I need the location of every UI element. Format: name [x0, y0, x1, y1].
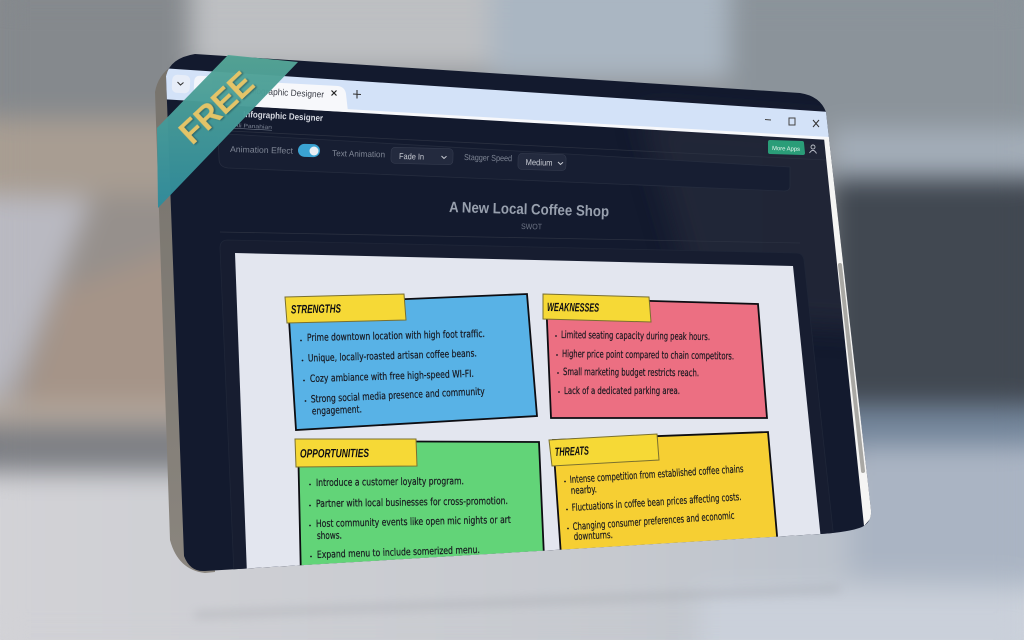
new tab: [353, 90, 361, 98]
threats list: downturns.: [574, 530, 613, 543]
window controls: [765, 119, 771, 120]
heading tag: weaknesses: WEAKNESSES: [547, 300, 599, 315]
scrollbar thumb: [840, 265, 863, 471]
ribbon: free: [157, 55, 298, 208]
select: medium: Medium: [525, 157, 553, 168]
app name: Infographic Designer: [243, 109, 324, 123]
screen sheen: [652, 130, 843, 325]
strengths list: Prime downtown location with high foot traffic.: [307, 329, 485, 344]
heading tag: opportunities: OPPORTUNITIES: [300, 446, 369, 460]
strengths list: Unique, locally-roasted artisan coffee beans.: [308, 348, 477, 364]
heading tag: opportunities: [295, 439, 417, 467]
opportunities list: Introduce a customer loyalty program.: [316, 476, 464, 489]
heading tag: strengths: [285, 294, 406, 323]
controls panel: [218, 134, 790, 191]
weaknesses list: [555, 330, 734, 397]
app subtitle: Ali Panahian: [234, 123, 272, 131]
paper: [235, 253, 821, 575]
opportunities list: [309, 476, 511, 561]
opportunities list: Expand menu to include somerized menu.: [317, 545, 480, 561]
weaknesses list: Limited seating capacity during peak hours.: [561, 330, 710, 343]
threats list: Changing consumer preferences and economic: [572, 511, 735, 533]
weaknesses list: Higher price point compared to chain competitors.: [562, 349, 734, 362]
stagger speed label: Stagger Speed: [464, 152, 512, 163]
threats list: nearby.: [571, 484, 597, 497]
device side edge: [155, 60, 215, 573]
tab button: [172, 75, 190, 93]
toggle: [298, 144, 320, 157]
browser tab strip: [160, 68, 830, 140]
panel: strengths: [285, 294, 537, 430]
app header: [230, 109, 826, 160]
text animation label: Text Animation: [332, 148, 385, 159]
device floor shadow: [195, 586, 840, 618]
device screen: [166, 54, 872, 571]
title: A New Local Coffee Shop: [449, 199, 609, 220]
strengths list: Strong social media presence and community: [311, 387, 485, 405]
heading tag: strengths: STRENGTHS: [291, 301, 341, 316]
threats list: [564, 464, 744, 543]
strengths list: Cozy ambiance with free high-speed WI-FI.: [310, 369, 474, 385]
animation effect label: Animation Effect: [230, 144, 294, 156]
page scrollbar: [824, 138, 872, 526]
panel: threats: [548, 431, 778, 550]
ribbon: free: FREE: [172, 64, 261, 151]
icon: user: [810, 145, 816, 154]
tab title: Infographic Designer: [247, 86, 324, 100]
tab: [255, 82, 348, 112]
more apps button: [768, 140, 805, 155]
subtitle: SWOT: [521, 222, 542, 231]
heading tag: threats: [549, 434, 659, 466]
opportunities list: shows.: [317, 531, 342, 542]
select: fade in: [391, 147, 453, 165]
strengths list: [300, 329, 485, 417]
weaknesses list: Lack of a dedicated parking area.: [564, 386, 680, 397]
threats list: Fluctuations in coffee bean prices affecting costs.: [571, 492, 742, 514]
heading tag: weaknesses: [543, 294, 651, 322]
tab close: [332, 90, 336, 96]
infographic container: [220, 240, 834, 575]
select: fade in: Fade In: [399, 151, 424, 162]
opportunities list: Host community events like open mic nights or art: [316, 515, 511, 530]
panel: weaknesses: [543, 294, 767, 418]
strengths list: engagement.: [312, 404, 362, 417]
heading tag: threats: THREATS: [555, 444, 589, 459]
select: medium: [518, 153, 566, 171]
weaknesses list: Small marketing budget restricts reach.: [563, 367, 699, 379]
more apps button: More Apps: [772, 146, 800, 153]
threats list: Intense competition from established coffee chains: [569, 464, 744, 486]
panel: opportunities: [295, 439, 545, 580]
opportunities list: Partner with local businesses for cross-promotion.: [316, 496, 508, 510]
